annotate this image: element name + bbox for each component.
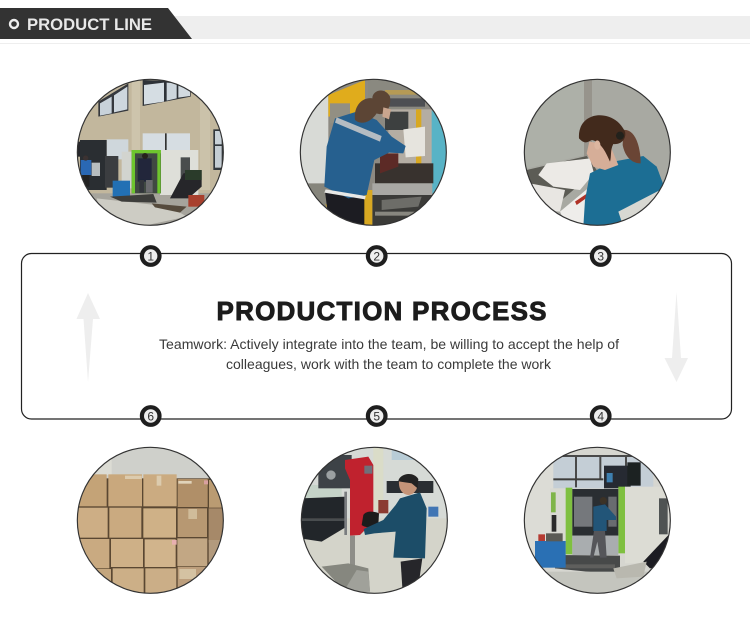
photo 2: worker at moulding machine — [298, 77, 448, 230]
step badge 1: 1 — [147, 250, 154, 264]
arrow: up — [76, 293, 100, 382]
description text: Teamwork: Actively integrate into the team, be willing to accept the help of — [159, 336, 619, 352]
arrow: down — [664, 292, 688, 382]
step badge 4 — [592, 407, 610, 425]
photo 4: operator at green CNC machine — [520, 445, 677, 595]
section header: product line — [0, 8, 750, 44]
step badge 6: 6 — [147, 410, 154, 424]
step badge 1 — [142, 247, 160, 265]
photo 1: workshop with CNC machine — [73, 77, 230, 230]
description text — [159, 336, 619, 372]
step badge 4: 4 — [597, 410, 604, 424]
description text: colleagues, work with the team to complete the work — [226, 356, 552, 372]
step badge 6 — [142, 407, 160, 425]
heading: production process: PRODUCTION PROCESS — [216, 296, 546, 326]
section header: product line: PRODUCT LINE — [27, 16, 152, 34]
step badge 2: 2 — [373, 250, 380, 264]
step badge 5: 5 — [373, 410, 380, 424]
step badge 3: 3 — [597, 250, 604, 264]
step badge 3 — [592, 247, 610, 265]
step badge 5 — [368, 407, 386, 425]
photo 6: stacked cartons — [73, 445, 230, 598]
process panel outline — [22, 254, 732, 419]
photo 3: worker inspecting white parts — [520, 77, 677, 230]
photo 5: worker operating red machine — [298, 445, 452, 598]
step badge 2 — [368, 247, 386, 265]
